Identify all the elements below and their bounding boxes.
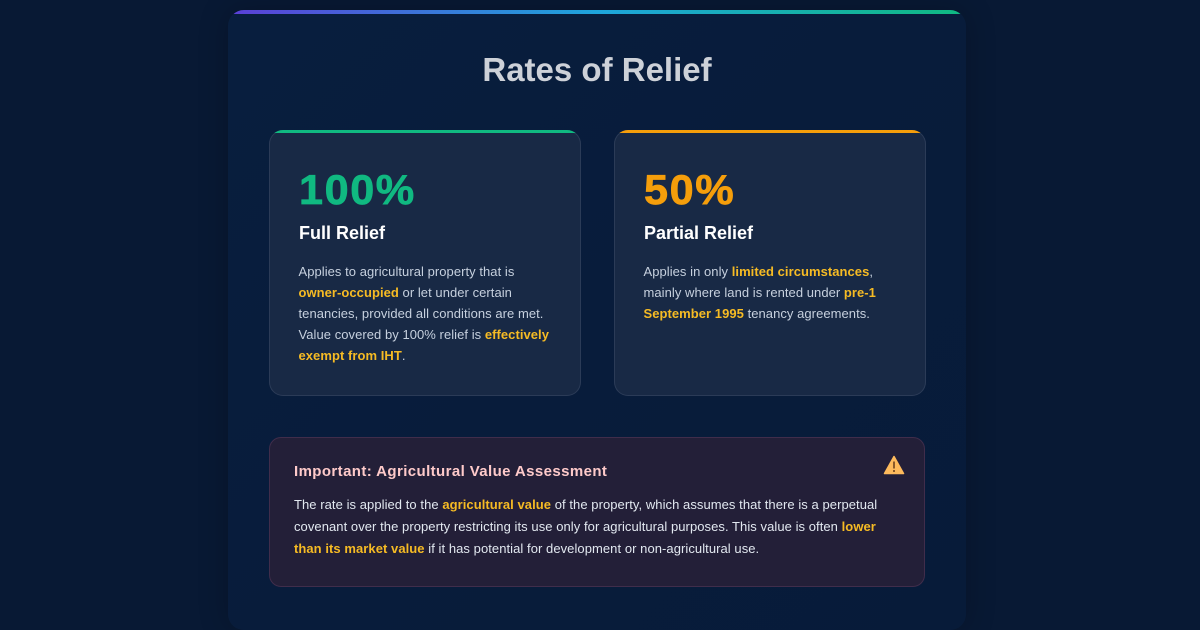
text: agricultural value explanation: than its market value if it has potential for development or non-agricultural use. (294, 541, 759, 556)
main panel: Rates of Relief (228, 10, 966, 630)
text: full relief description: Value covered by 100% relief is effectively (298, 327, 549, 342)
percentage: 100%: 100% (299, 166, 416, 212)
panel: partial relief card (614, 130, 926, 396)
text: agricultural value explanation: covenant over the property restricting its use only for agricultural purposes. This value is often lower (294, 519, 876, 534)
heading: important note: Important: Agricultural Value Assessment (294, 463, 607, 480)
text: agricultural value explanation (294, 497, 877, 556)
amber top accent (614, 130, 926, 133)
icon: warning triangle (884, 456, 904, 474)
text: partial relief description: Applies in only limited circumstances, (644, 264, 873, 279)
percentage: 50%: 50% (644, 166, 735, 212)
text: partial relief description: September 1995 tenancy agreements. (644, 306, 870, 321)
text: full relief description (298, 264, 549, 363)
panel: full relief card (269, 130, 581, 396)
heading: Partial Relief: Partial Relief (644, 223, 753, 243)
green top accent (269, 130, 581, 133)
title: Rates of Relief (482, 51, 712, 88)
text: full relief description: exempt from IHT. (298, 348, 406, 363)
text: full relief description: Applies to agricultural property that is (298, 264, 514, 279)
gradient top bar (228, 10, 966, 14)
text: partial relief description: mainly where land is rented under pre-1 (644, 285, 876, 300)
text: full relief description: owner-occupied or let under certain (298, 285, 512, 300)
text: agricultural value explanation: The rate is applied to the agricultural value of the property, which assumes that there is a perpetual (294, 497, 877, 512)
heading: Full Relief: Full Relief (299, 223, 385, 243)
panel: important note (269, 437, 925, 587)
text: full relief description: tenancies, provided all conditions are met. (298, 306, 543, 321)
text: partial relief description (644, 264, 876, 321)
